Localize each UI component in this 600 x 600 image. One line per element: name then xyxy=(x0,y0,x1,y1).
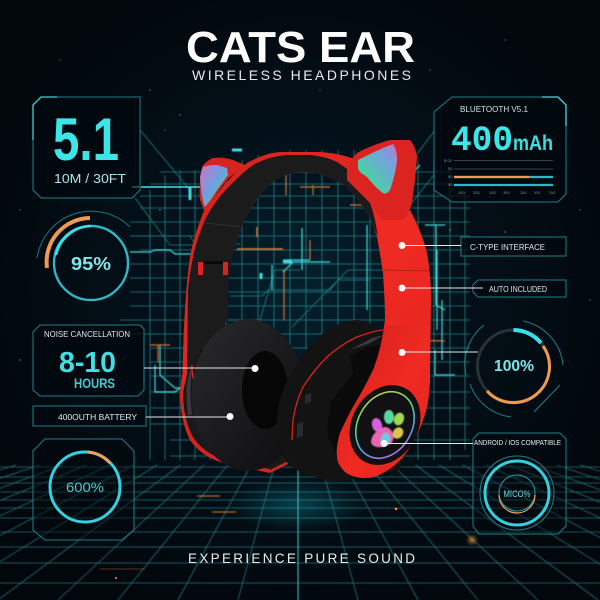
callout dots xyxy=(226,242,406,447)
gauge panel: android / ios compatible: ANDROID / IOS COMPATIBLE xyxy=(474,440,561,447)
gauge: 100%: 100% xyxy=(494,358,534,375)
gauge panel: android / ios compatible: MICO% xyxy=(504,489,531,500)
panel: range: 5.1 xyxy=(53,106,119,173)
left rear earcup shell xyxy=(180,350,290,473)
panel: bluetooth battery chart: BLUETOOTH V5.1 xyxy=(460,104,528,114)
subtitle: WIRELESS HEADPHONES xyxy=(192,67,411,83)
headphones xyxy=(180,140,435,482)
gauge: 100% xyxy=(465,321,563,417)
right-band seam xyxy=(384,270,430,271)
panel: bluetooth battery chart: mAh xyxy=(513,132,553,155)
bar chart: 90 xyxy=(448,182,453,187)
paw icon xyxy=(370,410,406,447)
bottom tagline: EXPERIENCE PURE SOUND xyxy=(188,551,415,566)
panel: noise cancellation hours: NOISE CANCELLATION xyxy=(44,329,130,339)
panel: noise cancellation hours xyxy=(33,325,144,396)
bar chart: 100 xyxy=(458,190,465,195)
bar chart: 200 xyxy=(473,190,480,195)
panel: auto included xyxy=(473,280,566,297)
gauge panel: 600% xyxy=(33,439,134,540)
perspective floor grid xyxy=(0,465,600,600)
gauge: 95% xyxy=(37,211,130,300)
left ear xyxy=(200,158,245,213)
floor glow xyxy=(228,479,368,531)
bar chart: 300 xyxy=(503,190,510,195)
bar chart: 100 xyxy=(489,190,496,195)
bar chart: 110 xyxy=(534,190,541,195)
right ear xyxy=(347,140,417,220)
orange glows xyxy=(150,175,467,362)
headband xyxy=(182,152,431,478)
earcup buttons xyxy=(297,393,311,438)
right earcup body xyxy=(277,320,410,482)
panel: range: 10M / 30FT xyxy=(54,171,126,186)
panel: battery label xyxy=(33,406,146,426)
panel: noise cancellation hours: HOURS xyxy=(74,376,115,391)
title: CATS EAR xyxy=(186,23,415,72)
bar chart: $ 00 xyxy=(444,158,453,163)
panel: battery label: 400OUTH BATTERY xyxy=(58,412,137,422)
gauge panel: 600%: 600% xyxy=(66,479,104,495)
panel: c-type interface: C-TYPE INTERFACE xyxy=(470,242,545,252)
floor light streaks xyxy=(100,496,475,579)
gauge panel: android / ios compatible xyxy=(473,433,566,534)
red right plate xyxy=(337,325,430,478)
panel: c-type interface xyxy=(461,237,566,256)
bar chart: 90 xyxy=(448,174,453,179)
panel: auto included: AUTO INCLUDED xyxy=(489,285,547,294)
bar chart: 110 xyxy=(520,190,527,195)
panel: range xyxy=(33,97,205,198)
panel: bluetooth battery chart: 400 xyxy=(451,121,513,161)
slider marks xyxy=(198,262,228,275)
bright circuit traces xyxy=(130,150,455,392)
bar chart xyxy=(444,158,556,195)
circuit grid behind headphones xyxy=(120,130,470,460)
left cushion xyxy=(192,319,304,471)
gauge: 95%: 95% xyxy=(71,254,111,274)
star specks xyxy=(19,39,591,361)
black inner band xyxy=(187,155,378,385)
bar chart: 50 xyxy=(448,166,453,171)
panel: bluetooth battery chart xyxy=(434,97,566,202)
callout lines xyxy=(144,246,483,444)
panel: noise cancellation hours: 8-10 xyxy=(59,347,116,379)
paw disc xyxy=(335,372,435,478)
bar chart: 110 xyxy=(549,190,556,195)
